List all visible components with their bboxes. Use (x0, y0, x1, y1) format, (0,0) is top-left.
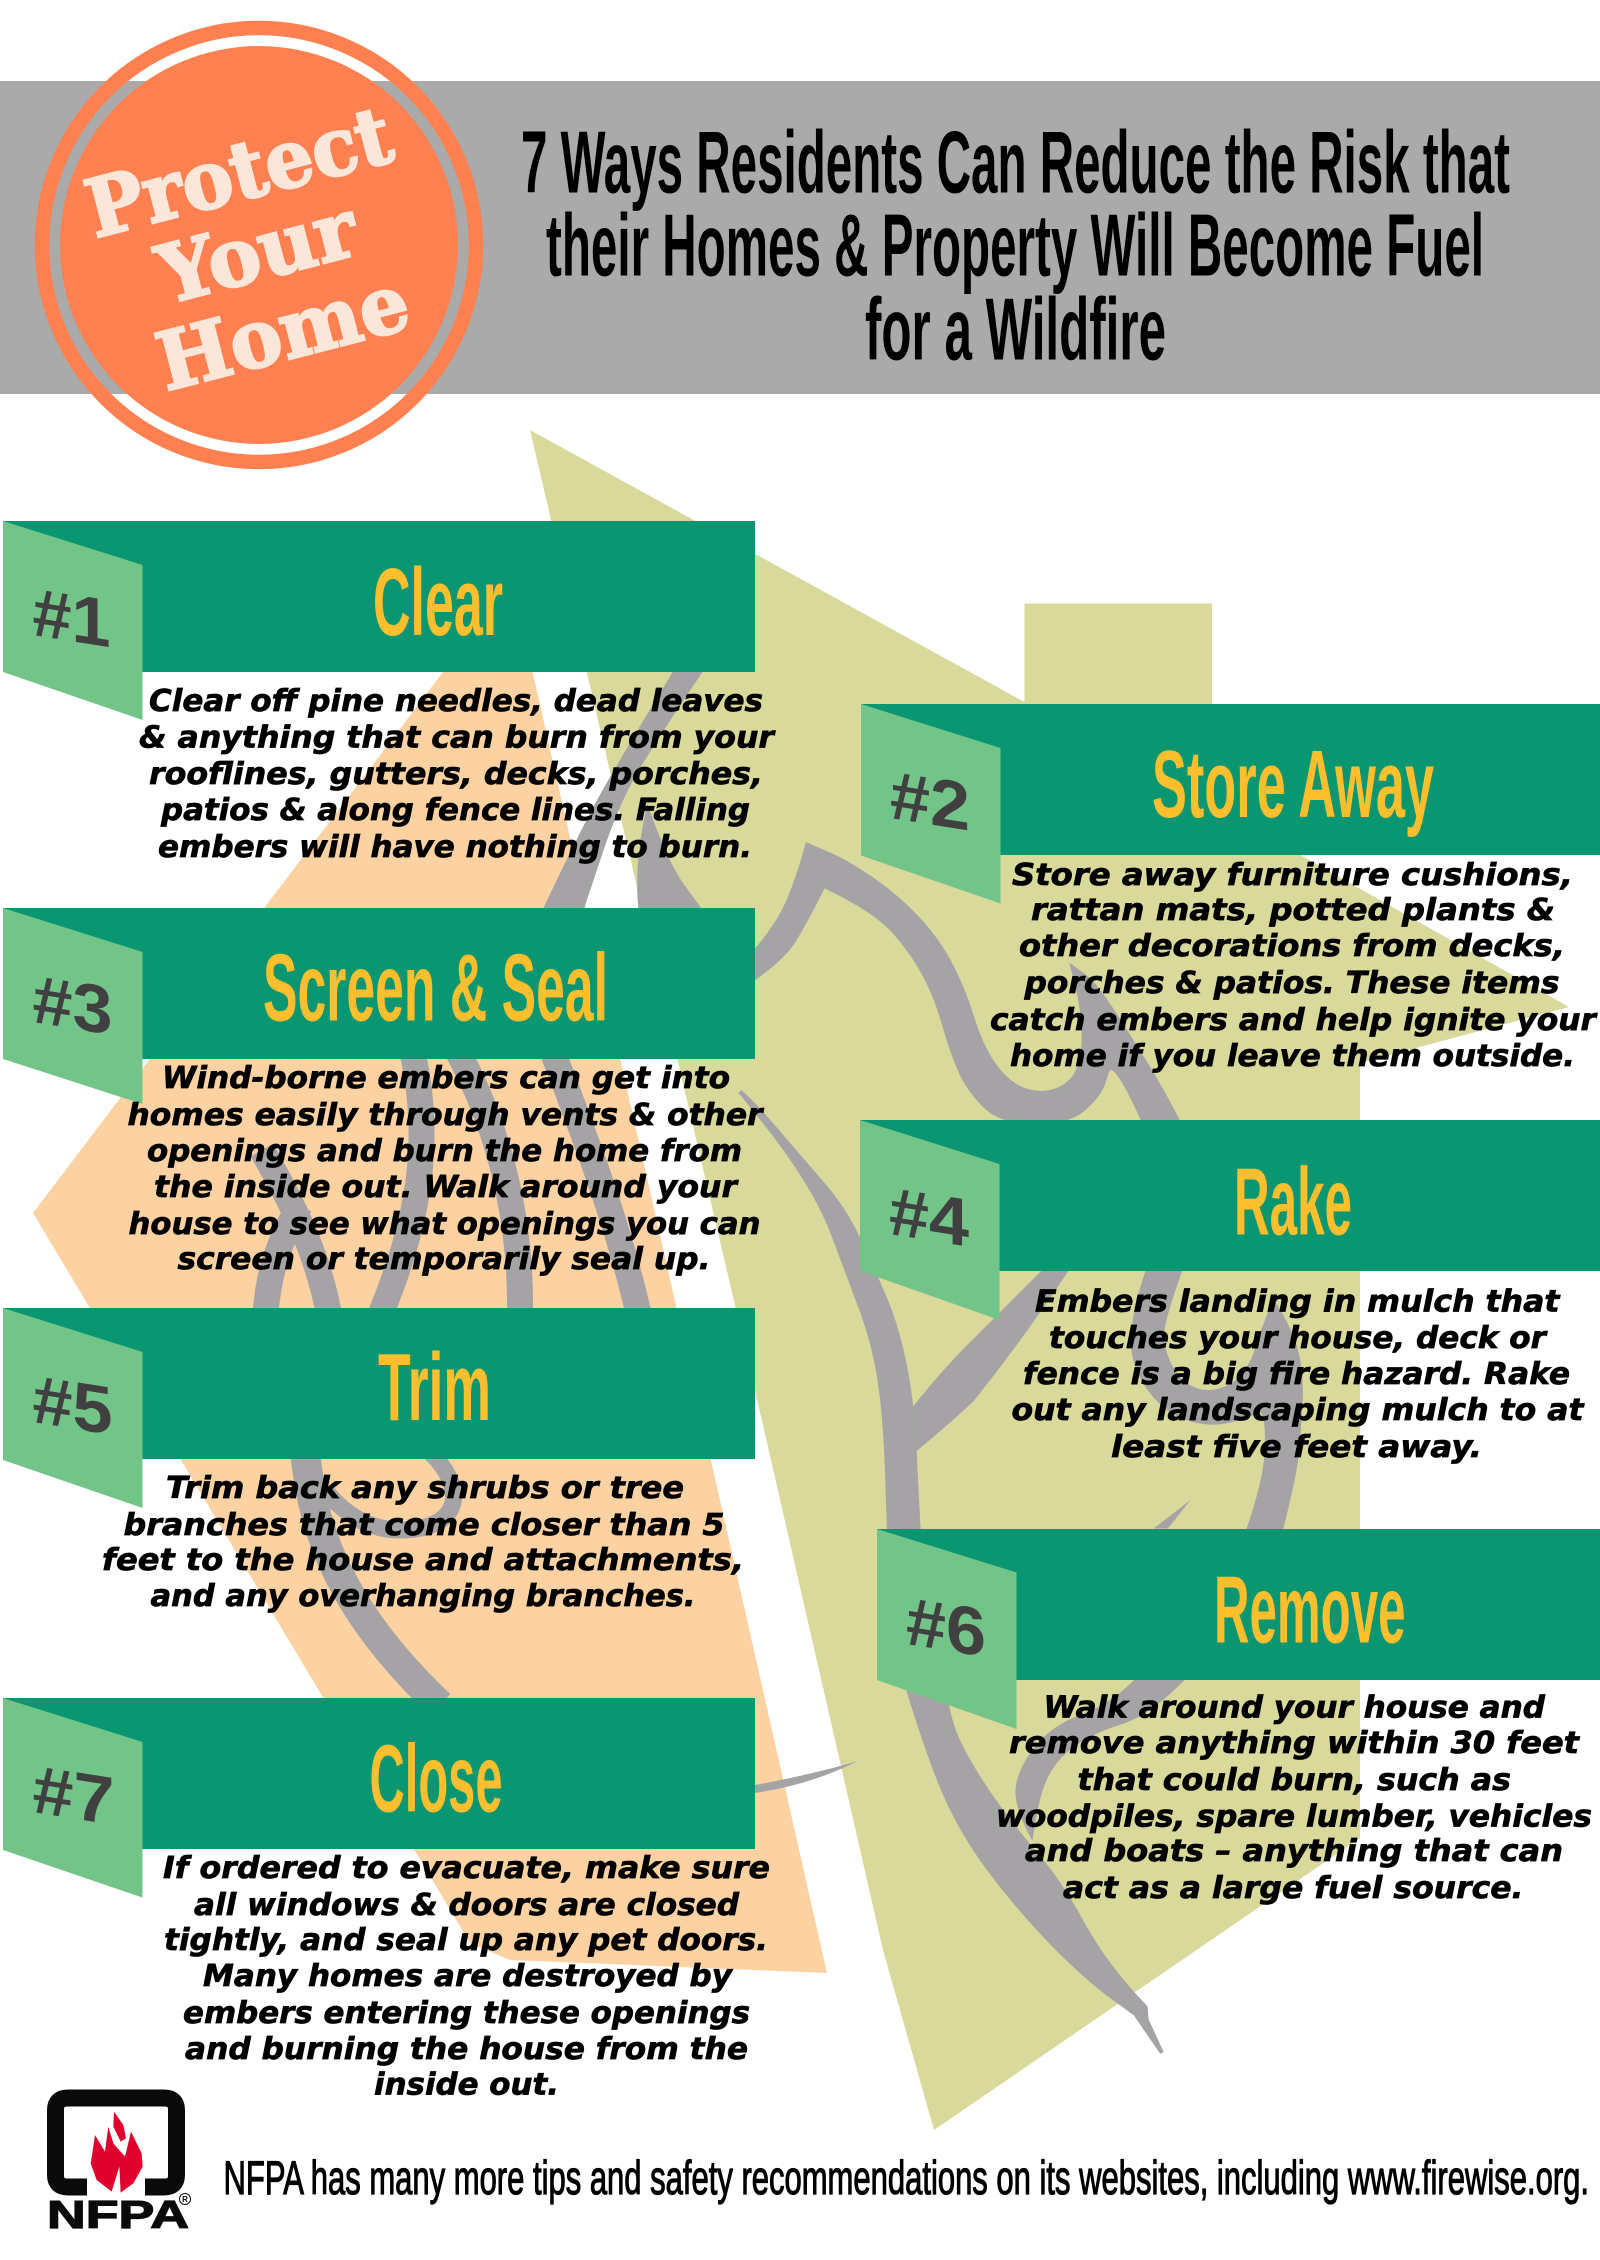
banner (3, 521, 755, 672)
logo frame (56, 2098, 176, 2187)
grey tree branches, right (756, 845, 1179, 1122)
flap (860, 1120, 1000, 1320)
body text: tightly, and seal up any pet doors. (164, 1923, 768, 1958)
body text: rooflines, gutters, decks, porches, (149, 757, 763, 792)
body text: woodpiles, spare lumber, vehicles (996, 1800, 1592, 1834)
body text: touches your house, deck or (1049, 1321, 1548, 1356)
banner (861, 704, 1600, 855)
grey tree U curve (1133, 1271, 1301, 1529)
number: #6 (906, 1583, 986, 1672)
body text: remove anything within 30 feet (1009, 1726, 1581, 1761)
body text (102, 1471, 744, 1614)
banner (860, 1120, 1600, 1271)
body text (996, 1690, 1592, 1906)
body text: Embers landing in mulch that (1035, 1284, 1561, 1320)
body text: branches that come closer than 5 (124, 1508, 724, 1543)
flap (3, 1698, 142, 1898)
body text: embers will have nothing to burn. (158, 830, 752, 865)
heading: Trim (378, 1334, 491, 1441)
registered mark: R (182, 2195, 188, 2204)
badge text: Your (147, 181, 367, 323)
panel: #1 clear (3, 521, 776, 865)
body text: and any overhanging branches. (150, 1579, 696, 1614)
grey arc upper (639, 811, 698, 906)
title: for a Wildfire (865, 280, 1166, 378)
body text: feet to the house and attachments, (102, 1543, 744, 1578)
body text: fence is a big fire hazard. Rake (1023, 1357, 1570, 1392)
number: #3 (32, 961, 112, 1050)
flap (877, 1529, 1016, 1729)
badge: protect your home (42, 28, 476, 462)
body text: screen or temporarily seal up. (178, 1242, 710, 1277)
body text: other decorations from decks, (1019, 929, 1565, 964)
body text: inside out. (374, 2068, 559, 2102)
grey trunk lower (907, 1686, 1162, 2053)
body text: If ordered to evacuate, make sure (163, 1851, 770, 1886)
flap (3, 908, 142, 1104)
badge disc (60, 46, 458, 444)
body text: rattan mats, potted plants & (1031, 893, 1555, 928)
number: #4 (889, 1173, 969, 1262)
panel: #2 store away (861, 704, 1600, 1074)
body text: openings and burn the home from (147, 1134, 742, 1169)
body text: Walk around your house and (1044, 1690, 1546, 1726)
grey trunk upper (740, 1092, 919, 1530)
body text: all windows & doors are closed (194, 1888, 740, 1923)
banner (3, 1308, 755, 1459)
body text: home if you leave them outside. (1010, 1039, 1575, 1074)
body text (990, 858, 1598, 1074)
heading: Screen & Seal (263, 934, 608, 1042)
grey hook (1017, 1682, 1180, 1835)
banner (3, 1698, 755, 1849)
body text: and boats – anything that can (1025, 1834, 1563, 1869)
badge ring (42, 28, 476, 462)
grey strands middle left (262, 1050, 640, 1320)
panel: #7 close (3, 1698, 770, 2102)
banner (3, 908, 755, 1059)
logo flame (91, 2112, 143, 2193)
flap (3, 521, 142, 720)
number: #2 (890, 757, 970, 846)
grey trunk branch (905, 1271, 1066, 1448)
body text: Many homes are destroyed by (203, 1959, 733, 1994)
body text: & anything that can burn from your (139, 720, 776, 756)
grey strands lower left (305, 1450, 454, 1705)
body text: porches & patios. These items (1023, 966, 1560, 1001)
registered mark (180, 2194, 190, 2204)
grey slim branch (700, 1761, 858, 1800)
banner (877, 1529, 1600, 1680)
number: #7 (32, 1751, 114, 1840)
nfpa logo (47, 2098, 190, 2237)
logo wordmark: NFPA (47, 2194, 189, 2237)
panel: #3 screen and seal (3, 908, 765, 1277)
body text: patios & along fence lines. Falling (160, 793, 750, 828)
panel: #5 trim (3, 1308, 755, 1614)
body text: that could burn, such as (1078, 1763, 1511, 1798)
flap (3, 1308, 142, 1508)
body text (1012, 1284, 1585, 1465)
body text: and burning the house from the (185, 2032, 748, 2067)
body text: Store away furniture cushions, (1012, 858, 1573, 893)
body text: Clear off pine needles, dead leaves (149, 684, 763, 719)
header band (0, 81, 1600, 394)
heading: Remove (1214, 1556, 1406, 1664)
body text: house to see what openings you can (128, 1207, 760, 1242)
number: #5 (32, 1361, 112, 1450)
olive house shape (530, 430, 1569, 2130)
panel: #4 rake (860, 1120, 1600, 1465)
body text: least five feet away. (1111, 1430, 1482, 1465)
heading: Rake (1234, 1148, 1352, 1256)
body text (163, 1851, 770, 2102)
body text: Trim back any shrubs or tree (166, 1471, 684, 1506)
body text: the inside out. Walk around your (154, 1170, 739, 1205)
body text: out any landscaping mulch to at (1012, 1393, 1585, 1428)
orange house shape (33, 581, 827, 1973)
body text: catch embers and help ignite your (990, 1003, 1598, 1038)
grey diagonal branch upper (546, 673, 699, 906)
flap (861, 704, 1000, 904)
number: #1 (32, 574, 111, 662)
title (521, 112, 1510, 378)
badge text: Protect (76, 87, 402, 256)
body text: homes easily through vents & other (128, 1098, 765, 1133)
heading: Close (370, 1726, 502, 1832)
panel: #6 remove (877, 1529, 1600, 1906)
heading: Clear (373, 549, 503, 656)
body text: Wind-borne embers can get into (162, 1061, 730, 1096)
badge text (76, 87, 419, 409)
body text (128, 1061, 765, 1277)
body text: embers entering these openings (183, 1996, 750, 2031)
badge text: Home (147, 254, 419, 409)
body text (139, 684, 776, 865)
grey leaf tips (1154, 1500, 1190, 1529)
body text: act as a large fuel source. (1063, 1871, 1524, 1906)
